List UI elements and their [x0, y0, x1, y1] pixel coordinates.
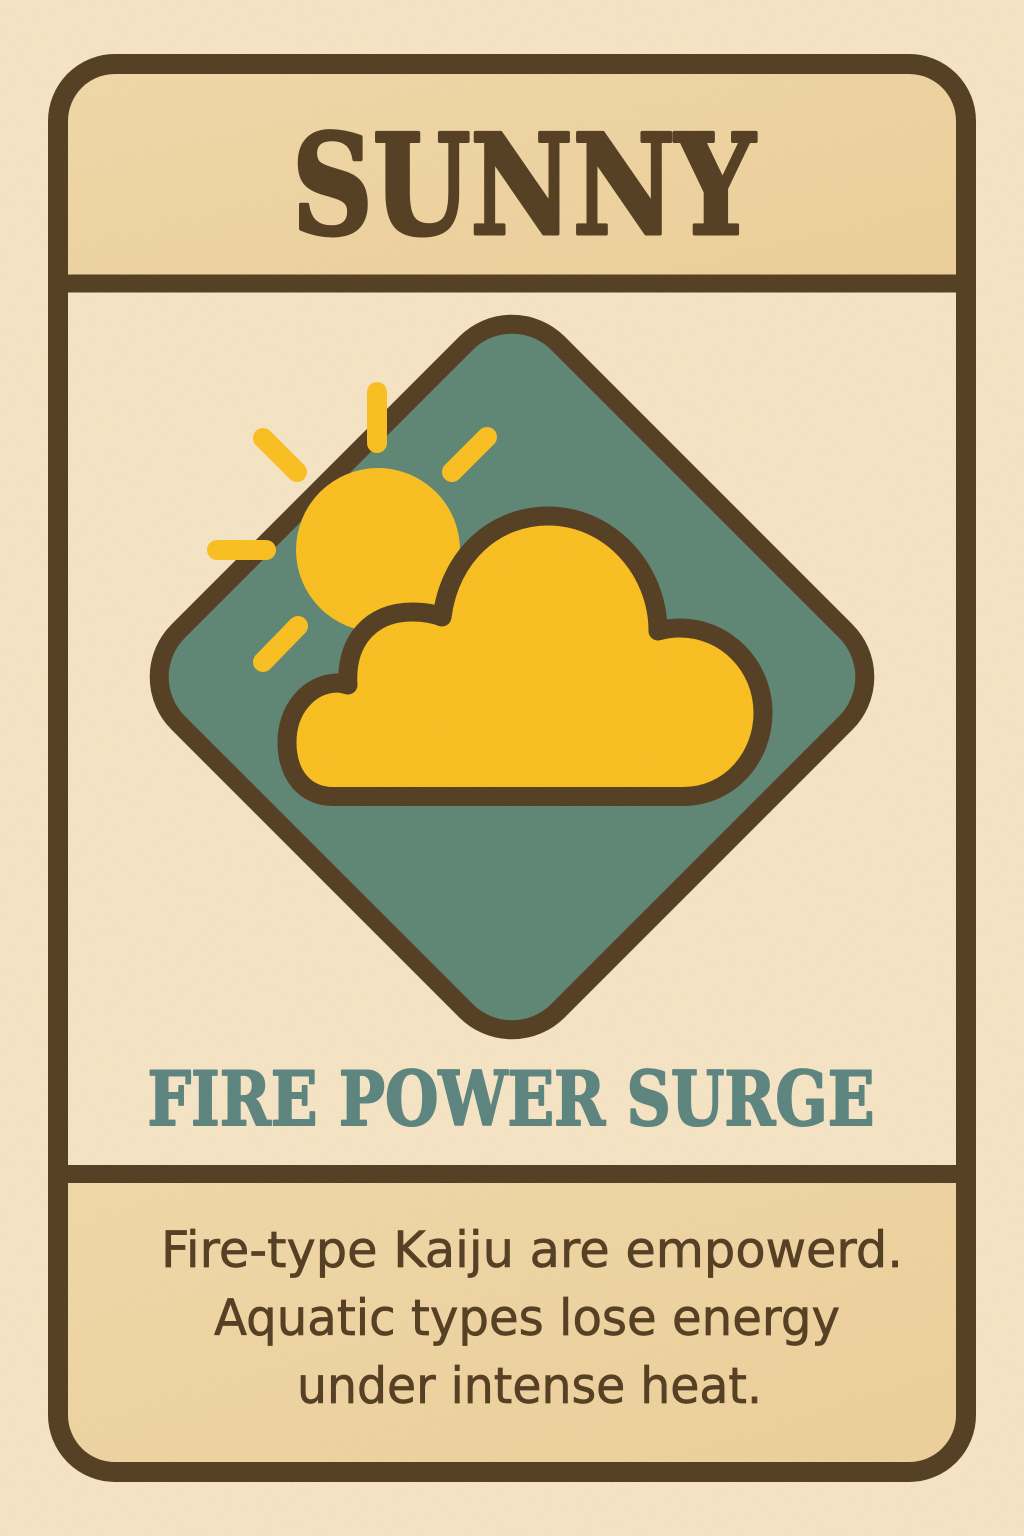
icon: sun and cloud badge — [132, 297, 892, 1057]
description text: Aquatic types lose energy — [214, 1289, 840, 1347]
description text: under intense heat. — [297, 1357, 762, 1415]
diamond badge — [132, 297, 892, 1057]
icon: sun — [217, 392, 487, 662]
description text: Fire-type Kaiju are empowerd. — [161, 1221, 903, 1279]
panel: description — [58, 1180, 966, 1472]
panel: header — [58, 64, 966, 279]
title: SUNNY — [292, 104, 756, 266]
description text — [161, 1221, 903, 1415]
subtitle: FIRE POWER SURGE — [148, 1055, 874, 1143]
icon: cloud — [287, 516, 763, 796]
